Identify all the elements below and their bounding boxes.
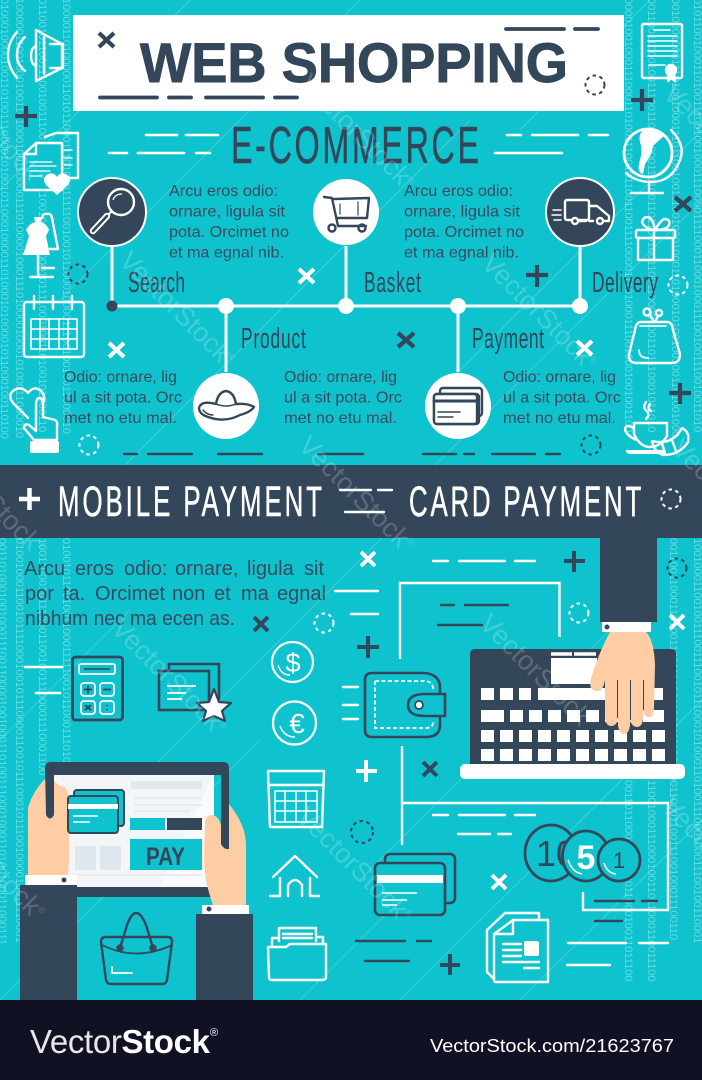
marker set: upper marks: [15, 89, 691, 454]
text block: mobile payment description: nibhum nec ma ecen as.: [25, 608, 235, 630]
icon: sun hat: [193, 373, 259, 439]
heading: mobile payment: MOBILE PAYMENT: [58, 477, 322, 526]
icon: calendar table: [268, 771, 324, 827]
watermarks: ®: [226, 351, 238, 363]
left hand: [28, 776, 69, 876]
watermarks: VectorStock: [114, 245, 237, 368]
text block: basket detail: met no etu mal.: [284, 410, 397, 427]
text block: mobile payment description: ornare,: [175, 558, 238, 580]
sleeve and cuff: [600, 538, 657, 632]
text: 1000011010000011010110001110100011111001001011000100001110010010011000010: [60, 0, 72, 434]
text block: basket: et ma egnal nib.: [404, 244, 519, 262]
text block: payment: Odio: ornare, lig: [503, 369, 616, 386]
footer url: VectorStock.com/21623767: [430, 1035, 674, 1056]
watermarks: ®: [36, 539, 48, 551]
text block: mobile payment description: ligula: [247, 558, 295, 580]
left sleeve: [20, 875, 77, 1000]
icon: calendar: [24, 296, 84, 357]
icon: dollar coin: [272, 642, 313, 682]
text block: mobile payment description: por: [25, 583, 54, 605]
dashed circle: [662, 490, 680, 508]
label: payment: Payment: [472, 323, 544, 355]
text block: mobile payment description: ma: [241, 583, 270, 605]
watermarks: VectorStock: [106, 613, 229, 736]
text block: mobile payment description: egnal: [277, 583, 326, 605]
icon: plus: [19, 488, 40, 510]
icon: coins: 1: [613, 848, 625, 873]
text block: payment: met no etu mal.: [503, 410, 616, 427]
watermarks: ®: [406, 174, 418, 186]
icon: coffee and croissant: [625, 402, 688, 455]
text block: basket: Arcu eros odio:: [404, 183, 513, 200]
icon: certificate: [642, 24, 682, 81]
watermarks: ®: [405, 536, 417, 548]
text: 0110010110011100100111001010001111001000011000101111000100110100101000110: [36, 0, 48, 432]
dashed circle: [586, 76, 604, 94]
watermarks: ®: [218, 719, 230, 731]
title panel: [73, 15, 624, 111]
x mark: [99, 33, 114, 47]
icon: documents: [487, 913, 548, 982]
timeline connector: [106, 246, 588, 372]
text block: search: ornare, ligula sit: [169, 204, 286, 220]
label: basket: Basket: [364, 267, 421, 299]
text: 00110011000110100110011100011000111100010011000110011100100011100110: [667, 538, 679, 940]
icon: coins: 10: [536, 833, 576, 874]
watermarks: ®: [586, 714, 598, 726]
banner: dark band: [0, 465, 702, 538]
icon: euro coin: [273, 702, 316, 744]
icon: dollar coin: $: [285, 648, 301, 678]
heading: card payment: CARD PAYMENT: [409, 477, 641, 526]
icon: cards with star: [159, 664, 231, 721]
text block: search: pota. Orcimet no: [169, 224, 289, 241]
illustration: hands holding tablet: [20, 762, 253, 1000]
right sleeve: [196, 905, 253, 1000]
icon: cart: [313, 179, 379, 245]
footer logo: VectorStock: [30, 1023, 211, 1060]
pay button: PAY: [146, 843, 185, 871]
icon: shopping bag: [101, 913, 172, 984]
watermarks: VectorStock: [291, 801, 414, 924]
icon: bank cards: [425, 373, 491, 439]
text block: basket detail: Odio: ornare, lig: [284, 369, 397, 386]
text block: search: Arcu eros odio:: [169, 183, 278, 200]
watermarks: VectorStock: [476, 248, 599, 371]
text: 1100100011100010011011000110011100: [645, 780, 657, 981]
registered mark: ®: [210, 1027, 218, 1039]
title: web shopping: WEB SHOPPING: [140, 31, 568, 94]
watermarks: ®: [588, 354, 600, 366]
icon: coins: 5: [577, 839, 595, 877]
tablet card icon: [68, 790, 124, 833]
text block: product: ul a sit pota. Orc: [64, 390, 182, 406]
text block: basket: [404, 183, 524, 262]
watermarks: ®: [36, 904, 48, 916]
icon: calculator: [72, 657, 122, 720]
icon: search: [78, 178, 146, 246]
text block: mobile payment description: eros: [75, 558, 114, 580]
text block: mobile payment description: sit: [304, 558, 324, 580]
icon: dashed circle: [80, 436, 98, 454]
text block: mobile payment description: ta.: [63, 583, 85, 605]
tablet right bezel: [221, 770, 229, 849]
text: 01001000110010111100010010111000011001011100010111001000010011110001: [13, 538, 25, 943]
band dashes: [340, 490, 392, 512]
text block: product: [64, 369, 182, 427]
text: 0000100100011100011010011100101100110011110000111010001110010001001001100: [622, 0, 634, 432]
text block: mobile payment description: odio:: [124, 558, 167, 580]
text: 0011001100010011100110011000110100110110010011001100001001101110001011010: [645, 0, 657, 432]
icon: wallet: [365, 673, 445, 737]
text block: payment: [503, 369, 621, 427]
text: 0010001000111010010001110110010011100100010001101000101001001001101001000: [669, 0, 681, 437]
text block: search: et ma egnal nib.: [169, 244, 284, 262]
hand on keyboard: [590, 632, 655, 734]
icon: dashed circle: [668, 276, 688, 294]
watermarks: VectorStock: [474, 608, 597, 731]
icon: coins: [525, 825, 640, 881]
icon: documents with heart: [24, 133, 78, 195]
label: product: Product: [241, 323, 306, 355]
pay button: [130, 839, 202, 871]
label: delivery: Delivery: [592, 267, 658, 299]
text block: search: [169, 183, 289, 262]
watermarks: ®: [36, 169, 48, 181]
text block: basket: ornare, ligula sit: [404, 204, 521, 220]
icon: speaker: [8, 30, 63, 81]
icon: dashed circle: [68, 264, 88, 284]
text block: mobile payment description: non: [172, 583, 205, 605]
text block: basket detail: ul a sit pota. Orc: [284, 390, 402, 406]
label: search: Search: [128, 267, 185, 299]
icon: mannequins: [23, 214, 58, 277]
watermarks: VectorStock: [294, 68, 417, 191]
text block: mobile payment description: Orcimet: [95, 583, 165, 605]
text: 0100101100100110001111100101100011101000: [60, 538, 72, 775]
watermarks: VectorStock: [293, 430, 416, 553]
text: 0011011000110011001100010011011100: [622, 780, 634, 981]
text block: mobile payment description: et: [214, 583, 231, 605]
heading dashes: [109, 135, 608, 153]
right hand: [204, 804, 246, 905]
text: 1000001100100010011010001001100001110100001000111010000100010100011000010: [13, 0, 25, 438]
text block: payment: ul a sit pota. Orc: [503, 390, 621, 406]
text block: basket detail: [284, 369, 402, 427]
text block: mobile payment description: Arcu: [24, 558, 65, 580]
icon: globe: [624, 129, 682, 193]
footer bar: [0, 1000, 702, 1080]
icon: bank cards outline: [375, 854, 455, 915]
icon: house: [270, 856, 319, 896]
icon: folder: [268, 928, 326, 980]
marks around mobile payment section: [254, 551, 686, 975]
text block: basket: pota. Orcimet no: [404, 224, 524, 241]
watermarks: ®: [403, 907, 415, 919]
text block: mobile payment description: [24, 558, 326, 630]
icon: coin purse: [629, 308, 680, 363]
heading: e-commerce: E-COMMERCE: [231, 117, 479, 175]
illustration: laptop and hand: [460, 538, 685, 779]
connector lines and dashes: [335, 561, 668, 965]
text: 1001100010111000110010011100001110001100: [36, 538, 48, 775]
icon: gift: [636, 217, 675, 260]
icon: heart touch: [10, 388, 59, 453]
title accent dashes: [100, 29, 598, 98]
text block: product: met no etu mal.: [64, 410, 177, 427]
text block: product: Odio: ornare, lig: [64, 369, 177, 386]
icon: delivery truck: [546, 178, 614, 246]
icon: euro coin: €: [289, 708, 305, 739]
